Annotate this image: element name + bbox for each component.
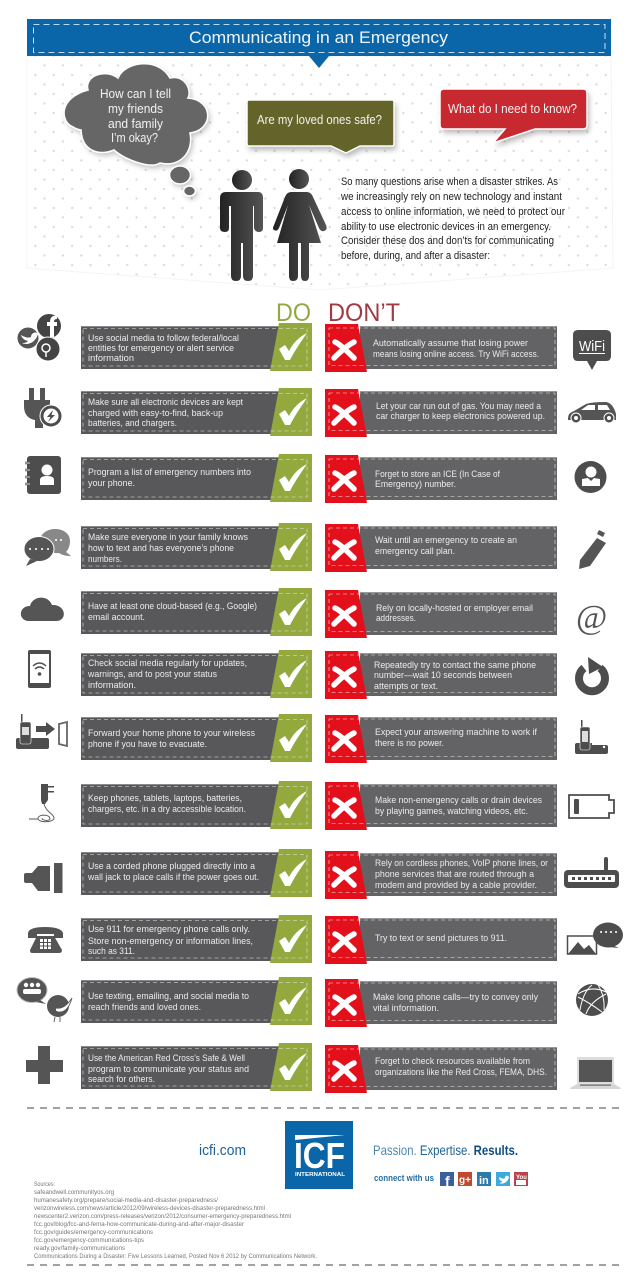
do text 2: charged with easy-to-find, back-up bbox=[88, 408, 223, 419]
sources: Communications During a Disaster: Five Lessons Learned, Posted Nov 6 2012 by Communications Network. bbox=[34, 1253, 317, 1260]
icon: group bubble and bird bbox=[17, 978, 72, 1022]
do text 11 bbox=[88, 991, 249, 1013]
sources: fcc.gov/emergency-communications-tips bbox=[34, 1237, 145, 1244]
do row 4 bbox=[24, 523, 312, 571]
don't text 4: emergency call plan. bbox=[375, 546, 455, 557]
icon: address book bbox=[25, 456, 61, 494]
don't text 5 bbox=[376, 603, 533, 624]
do text 8: chargers, etc. in a dry accessible location. bbox=[88, 804, 246, 815]
icon: cloud bbox=[21, 598, 64, 621]
do text 12 bbox=[88, 1053, 249, 1085]
cloud text: I’m okay? bbox=[111, 131, 158, 145]
do text 5 bbox=[88, 601, 257, 623]
don't row 11 bbox=[325, 979, 608, 1027]
do row 11 bbox=[17, 977, 312, 1025]
don't row 5 bbox=[325, 590, 607, 638]
do row 1 bbox=[17, 314, 312, 371]
icon: desk telephone bbox=[28, 927, 63, 953]
icon: google plus: g+ bbox=[459, 1175, 471, 1186]
icon: picture and chat bubble bbox=[568, 922, 623, 954]
don't text 6: attempts or text. bbox=[374, 681, 438, 692]
do text 10 bbox=[88, 924, 253, 957]
DON'T heading: DON’T bbox=[328, 299, 400, 327]
icon: twitter bbox=[496, 1172, 510, 1186]
olive speech bubble: Are my loved ones safe? bbox=[257, 113, 382, 127]
sources: humanesafety.org/prepare/social-media-and-disaster-preparedness/ bbox=[34, 1197, 218, 1204]
intro paragraph: So many questions arise when a disaster strikes. As bbox=[341, 176, 558, 188]
don't row 9 bbox=[325, 851, 619, 899]
do row 9 bbox=[24, 849, 312, 897]
don't text 9: Rely on cordless phones, VoIP phone lines, or bbox=[375, 858, 548, 869]
do text 7: Forward your home phone to your wireless bbox=[88, 728, 255, 739]
don't text 3 bbox=[375, 469, 500, 490]
don't text 1 bbox=[373, 338, 539, 360]
do text 5: Have at least one cloud-based (e.g., Google) bbox=[88, 601, 257, 612]
do row 10 bbox=[28, 915, 312, 963]
icon: WiFi bubble bbox=[573, 330, 611, 370]
do text 9: wall jack to place calls if the power goes out. bbox=[87, 872, 259, 883]
sources: Sources: bbox=[34, 1181, 55, 1188]
icon: home phone forwarded to mobile bbox=[16, 714, 67, 749]
do text 3: Program a list of emergency numbers into bbox=[88, 467, 251, 478]
don't text 1: means losing online access. Try WiFi access. bbox=[373, 349, 539, 360]
don't text 9 bbox=[375, 858, 548, 891]
icon: man and woman bbox=[220, 169, 327, 281]
intro paragraph: Consider these dos and don’ts for communicating bbox=[341, 235, 554, 247]
don't text 5: addresses. bbox=[376, 613, 416, 624]
don't text 4 bbox=[375, 535, 517, 557]
don't text 11: vital information. bbox=[373, 1003, 439, 1014]
icon: WiFi bubble: WiFi bbox=[579, 338, 605, 355]
do text 10: Use 911 for emergency phone calls only. bbox=[88, 924, 250, 935]
don't text 8: Make non-emergency calls or drain devices bbox=[375, 795, 542, 806]
icon: linkedin: in bbox=[479, 1175, 489, 1187]
do text 1 bbox=[88, 333, 239, 364]
sources: fcc.gov/guides/emergency-communications bbox=[34, 1229, 154, 1236]
ICF logo: INTERNATIONAL bbox=[295, 1172, 346, 1178]
icon: router bbox=[564, 857, 619, 888]
do text 10: Store non-emergency or information lines, bbox=[88, 936, 253, 947]
icon: social media bbox=[17, 314, 61, 361]
footer divider top bbox=[27, 1107, 625, 1109]
do text 3: your phone. bbox=[88, 478, 135, 489]
title banner bbox=[27, 19, 611, 68]
do text 2 bbox=[88, 397, 243, 429]
do text 2: batteries, and chargers. bbox=[88, 418, 177, 429]
don't text 12 bbox=[375, 1056, 547, 1078]
header panel: dotted background bbox=[27, 56, 613, 290]
don't text 8 bbox=[375, 795, 542, 817]
icon: youtube: You bbox=[516, 1175, 527, 1181]
icon: man bbox=[220, 170, 263, 281]
don't text 1: Automatically assume that losing power bbox=[373, 338, 528, 349]
don't text 4: Wait until an emergency to create an bbox=[375, 535, 517, 546]
do text 6: information. bbox=[88, 680, 136, 691]
website link: icfi.com bbox=[199, 1143, 246, 1159]
do text 4: numbers. bbox=[88, 554, 122, 565]
don't text 12: Forget to check resources available from bbox=[375, 1056, 530, 1067]
ICF logo bbox=[285, 1121, 353, 1189]
sources bbox=[34, 1181, 317, 1260]
icon: cordless phone bbox=[575, 720, 608, 754]
do row 3 bbox=[25, 454, 312, 502]
icon: car bbox=[568, 402, 616, 423]
cloud text bbox=[100, 87, 171, 145]
icon: refresh arrow bbox=[579, 657, 605, 691]
icon: low battery bbox=[569, 795, 614, 818]
don't text 3: Forget to store an ICE (In Case of bbox=[375, 469, 500, 480]
don't text 11 bbox=[373, 992, 538, 1014]
don't row 4 bbox=[325, 524, 606, 572]
don't row 6 bbox=[325, 651, 605, 699]
do text 12: Use the American Red Cross’s Safe & Well bbox=[88, 1053, 245, 1064]
do row 6 bbox=[28, 650, 312, 698]
intro paragraph: before, during, and after a disaster: bbox=[341, 250, 490, 262]
icon: charger and cord bbox=[29, 784, 54, 822]
don't text 3: Emergency) number. bbox=[375, 479, 456, 490]
icon: person circle bbox=[574, 461, 606, 493]
footer divider bottom bbox=[27, 1264, 625, 1266]
sources: verizonwireless.com/news/article/2012/09/wireless-devices-disaster-preparedness.html bbox=[34, 1205, 265, 1212]
icon: pencil bbox=[579, 530, 606, 569]
do row 8 bbox=[29, 781, 312, 829]
don't text 7: Expect your answering machine to work if bbox=[375, 727, 537, 738]
do text 6: Check social media regularly for updates, bbox=[88, 658, 247, 669]
do text 11: reach friends and loved ones. bbox=[88, 1002, 201, 1013]
connect with us: connect with us bbox=[374, 1173, 434, 1184]
do text 12: search for others. bbox=[88, 1074, 155, 1085]
sources: ready.gov/family-communications bbox=[34, 1245, 126, 1252]
do text 8 bbox=[88, 793, 246, 815]
sources: fcc.gov/blog/fcc-and-fema-how-communicate-during-and-after-major-disaster bbox=[34, 1221, 245, 1228]
don't text 9: phone services that are routed through a bbox=[375, 869, 535, 880]
do text 11: Use texting, emailing, and social media to bbox=[88, 991, 249, 1002]
icon: at sign: @ bbox=[576, 599, 607, 636]
do text 12: program to communicate your status and bbox=[88, 1064, 249, 1075]
don't row 1 bbox=[325, 324, 611, 372]
do row 2 bbox=[24, 388, 312, 436]
intro paragraph: access to online information, we need to protect our bbox=[341, 206, 565, 218]
don't text 2 bbox=[376, 401, 545, 422]
do text 4 bbox=[88, 532, 248, 565]
do text 10: such as 311. bbox=[88, 946, 135, 957]
don't text 7: there is no power. bbox=[375, 738, 444, 749]
don't row 3 bbox=[325, 455, 606, 503]
icon: wall jack bbox=[24, 863, 62, 893]
cloud text: and family bbox=[108, 117, 164, 131]
do row 5 bbox=[21, 588, 312, 636]
intro paragraph: ability to use electronic devices in an emergency. bbox=[341, 221, 551, 233]
don't row 8 bbox=[325, 782, 614, 830]
don't text 6: number—wait 10 seconds between bbox=[374, 670, 512, 681]
icon: globe network bbox=[576, 984, 608, 1016]
icon: chat bubbles bbox=[24, 529, 71, 566]
don't text 6 bbox=[374, 660, 536, 692]
don't text 5: Rely on locally-hosted or employer email bbox=[376, 603, 533, 614]
do text 9: Use a corded phone plugged directly into a bbox=[88, 861, 256, 872]
icon: facebook: f bbox=[445, 1173, 450, 1189]
red speech bubble: What do I need to know? bbox=[448, 102, 577, 116]
do text 7 bbox=[88, 728, 255, 750]
do text 4: how to text and has everyone’s phone bbox=[88, 543, 234, 554]
do text 6 bbox=[87, 658, 247, 691]
DO heading: DO bbox=[276, 299, 311, 327]
icon: red cross bbox=[26, 1046, 63, 1084]
do text 8: Keep phones, tablets, laptops, batteries, bbox=[88, 793, 242, 804]
don't text 2: car charger to keep electronics powered up. bbox=[376, 411, 545, 422]
title: Communicating in an Emergency bbox=[189, 28, 449, 47]
do text 6: warnings, and to post your status bbox=[87, 669, 217, 680]
icon: woman bbox=[273, 169, 327, 281]
do text 5: email account. bbox=[88, 612, 145, 623]
don't text 11: Make long phone calls—try to convey only bbox=[373, 992, 538, 1003]
intro paragraph: we increasingly rely on new technology and instant bbox=[340, 191, 562, 203]
intro paragraph bbox=[340, 176, 565, 262]
do text 7: phone if you have to evacuate. bbox=[88, 739, 207, 750]
do text 1: entities for emergency or alert service bbox=[88, 343, 234, 354]
do row 7 bbox=[16, 714, 312, 762]
icon: plug with charge bbox=[24, 388, 62, 428]
cloud text: How can I tell bbox=[100, 87, 171, 101]
don't row 10 bbox=[325, 916, 623, 964]
don't text 2: Let your car run out of gas. You may need a bbox=[376, 401, 542, 412]
cloud text: my friends bbox=[108, 102, 163, 116]
ICF logo: ICF bbox=[294, 1135, 345, 1176]
don't text 6: Repeatedly try to contact the same phone bbox=[374, 660, 536, 671]
do text 9 bbox=[87, 861, 259, 883]
don't text 7 bbox=[375, 727, 537, 749]
don't text 9: modem and provided by a cable provider. bbox=[375, 880, 537, 891]
do text 2: Make sure all electronic devices are kept bbox=[88, 397, 243, 408]
do row 12 bbox=[26, 1043, 312, 1091]
don't text 12: organizations like the Red Cross, FEMA, DHS. bbox=[375, 1067, 547, 1078]
don't row 7 bbox=[325, 715, 608, 763]
olive speech bubble bbox=[247, 100, 396, 157]
don't text 8: by playing games, watching videos, etc. bbox=[375, 806, 528, 817]
icon: phone with wifi bbox=[28, 650, 51, 688]
do text 4: Make sure everyone in your family knows bbox=[88, 532, 248, 543]
red speech bubble bbox=[440, 89, 589, 147]
icon: laptop bbox=[570, 1057, 621, 1089]
do text 3 bbox=[88, 467, 251, 489]
tagline: Passion. Expertise. Results. bbox=[373, 1142, 518, 1158]
don't row 2 bbox=[325, 389, 616, 437]
do text 1: information bbox=[88, 353, 134, 364]
do text 1: Use social media to follow federal/local bbox=[88, 333, 239, 344]
don't row 12 bbox=[325, 1045, 621, 1093]
don't text 10: Try to text or send pictures to 911. bbox=[375, 933, 507, 944]
social icons bbox=[440, 1172, 528, 1189]
sources: safeandwell.communityos.org bbox=[34, 1189, 114, 1196]
thought cloud bbox=[64, 64, 210, 199]
sources: newscenter2.verizon.com/press-releases/verizon/2012/consumer-emergency-preparedness.html bbox=[34, 1213, 291, 1220]
